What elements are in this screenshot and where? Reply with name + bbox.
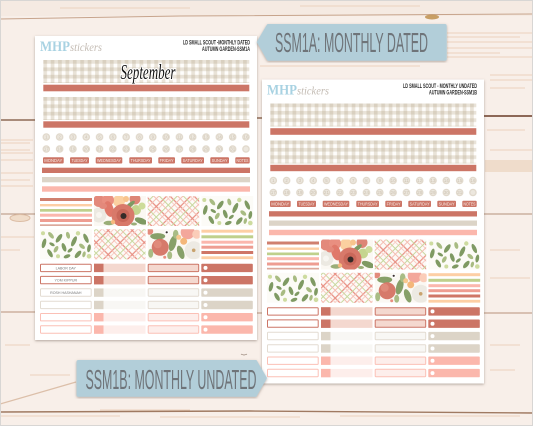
- date dots: 27: [404, 190, 409, 195]
- red bar: [270, 165, 476, 171]
- date dots: 4: [312, 178, 315, 183]
- weekday tabs: NOTES: [236, 158, 248, 163]
- date dots: 26: [391, 190, 396, 195]
- date dots: 30: [444, 190, 449, 195]
- gingham header one: [43, 60, 249, 83]
- weekday tabs: MONDAY: [271, 202, 289, 207]
- date dots: 24: [364, 190, 369, 195]
- date dots: 23: [351, 190, 356, 195]
- date dots: 13: [431, 178, 436, 183]
- date dots: 15: [457, 178, 463, 183]
- date dots: 11: [177, 135, 182, 140]
- date dots: 6: [339, 178, 342, 183]
- date dots: 8: [365, 178, 368, 183]
- date dots: 19: [297, 190, 303, 195]
- sheet: SSM1A monthly dated: [35, 36, 257, 340]
- long bars: [42, 168, 250, 192]
- date dots: 24: [137, 147, 142, 152]
- date dots: 12: [190, 135, 196, 140]
- checklist label rows: LABOR DAY: [56, 266, 77, 270]
- date dots: 12: [417, 178, 423, 183]
- date dots: 26: [164, 147, 169, 152]
- date dots: 25: [377, 190, 383, 195]
- date dots: 25: [150, 147, 156, 152]
- checklist label rows: YOM KIPPUR: [55, 279, 77, 283]
- weekday tabs: [43, 157, 250, 164]
- sheet title: LD SMALL SCOUT - MONTHLY UNDATED: [403, 83, 477, 90]
- date dots: 18: [284, 190, 290, 195]
- month script: September: [120, 60, 176, 84]
- weekday tabs: WEDNESDAY: [324, 202, 348, 207]
- date dots: 31: [457, 190, 463, 195]
- date dots: 7: [125, 135, 128, 140]
- date dots: 14: [217, 135, 222, 140]
- date dots: 18: [57, 147, 63, 152]
- date dots: 6: [112, 135, 115, 140]
- date dots: 17: [271, 190, 276, 195]
- date dots: 29: [431, 190, 436, 195]
- weekday tabs: FRIDAY: [387, 202, 401, 207]
- date dots: 11: [404, 178, 409, 183]
- weekday tabs: SUNDAY: [212, 158, 228, 163]
- tag: SSM1A monthly dated: [257, 24, 447, 61]
- logo: stickers: [70, 40, 102, 54]
- weekday tabs: TUESDAY: [72, 158, 88, 163]
- date dots: 10: [391, 178, 396, 183]
- date dots: 23: [124, 147, 129, 152]
- date dots: 21: [324, 190, 329, 195]
- weekday tabs: NOTES: [464, 202, 476, 207]
- long bars: [269, 211, 477, 235]
- date dots: 27: [177, 147, 182, 152]
- weekday tabs: THURSDAY: [358, 202, 378, 207]
- sheet paper: [35, 36, 257, 340]
- weekday tabs: [270, 201, 477, 207]
- pattern stickers: [267, 237, 480, 303]
- date dots: 1: [45, 135, 48, 140]
- date dots: 16: [244, 135, 249, 140]
- date dots: 28: [417, 190, 423, 195]
- date dots: 29: [204, 147, 209, 152]
- red bar: [43, 121, 249, 128]
- weekday tabs: SATURDAY: [183, 158, 203, 163]
- date dots: 13: [204, 135, 209, 140]
- date dots: 15: [230, 135, 236, 140]
- logo: MHP: [40, 39, 70, 55]
- date dots: [40, 131, 253, 155]
- gingham header two: [43, 97, 249, 120]
- date dots: 10: [164, 135, 169, 140]
- weekday tabs: SATURDAY: [410, 202, 430, 207]
- gingham header two: [270, 140, 476, 164]
- weekday tabs: WEDNESDAY: [97, 158, 121, 163]
- gingham header one: [270, 104, 476, 126]
- date dots: 2: [285, 178, 288, 183]
- weekday tabs: FRIDAY: [160, 158, 174, 163]
- checklist label rows: [268, 307, 480, 377]
- date dots: 22: [337, 190, 343, 195]
- date dots: 5: [98, 135, 101, 140]
- sheet title: AUTUMN GARDEN-SSM1B: [429, 90, 477, 96]
- text: SSM1B: MONTHLY UNDATED: [86, 364, 256, 395]
- checklist label rows: [40, 264, 253, 334]
- date dots: 22: [110, 147, 116, 152]
- red bar: [43, 85, 249, 91]
- date dots: 7: [352, 178, 355, 183]
- date dots: 30: [217, 147, 222, 152]
- date dots: 19: [70, 147, 76, 152]
- date dots: 28: [190, 147, 196, 152]
- date dots: 9: [379, 178, 382, 183]
- date dots: 16: [471, 178, 476, 183]
- date dots: 17: [44, 147, 49, 152]
- date dots: 2: [58, 135, 61, 140]
- logo: [40, 39, 102, 55]
- date dots: 3: [299, 178, 302, 183]
- date dots: 14: [444, 178, 449, 183]
- sheet title: AUTUMN GARDEN-SSM1A: [202, 46, 250, 53]
- date dots: 1: [272, 178, 275, 183]
- weekday tabs: SUNDAY: [439, 202, 455, 207]
- weekday tabs: THURSDAY: [131, 158, 151, 163]
- date dots: 8: [138, 135, 141, 140]
- pattern stickers: [40, 194, 253, 260]
- weekday tabs: TUESDAY: [298, 202, 314, 207]
- sheet: SSM1B monthly undated: [262, 80, 484, 384]
- sheet title: [403, 83, 477, 96]
- logo: stickers: [297, 84, 329, 98]
- date dots: 20: [311, 190, 316, 195]
- date dots: 20: [84, 147, 89, 152]
- date dots: 21: [97, 147, 102, 152]
- sheet title: [183, 40, 250, 53]
- date dots: 31: [230, 147, 236, 152]
- logo: [267, 82, 329, 98]
- date dots: 3: [72, 135, 75, 140]
- date dots: 9: [152, 135, 155, 140]
- checklist label rows: ROSH HASHANAH: [50, 291, 82, 295]
- date dots: 4: [85, 135, 88, 140]
- red bar: [270, 128, 476, 135]
- logo: MHP: [267, 82, 297, 98]
- sheet paper: [262, 80, 484, 384]
- tag: SSM1B monthly undated: [76, 360, 267, 397]
- date dots: 5: [325, 178, 328, 183]
- sheet title: LD SMALL SCOUT -MONTHLY DATED: [183, 40, 250, 46]
- weekday tabs: MONDAY: [44, 158, 62, 163]
- date dots: [267, 174, 480, 198]
